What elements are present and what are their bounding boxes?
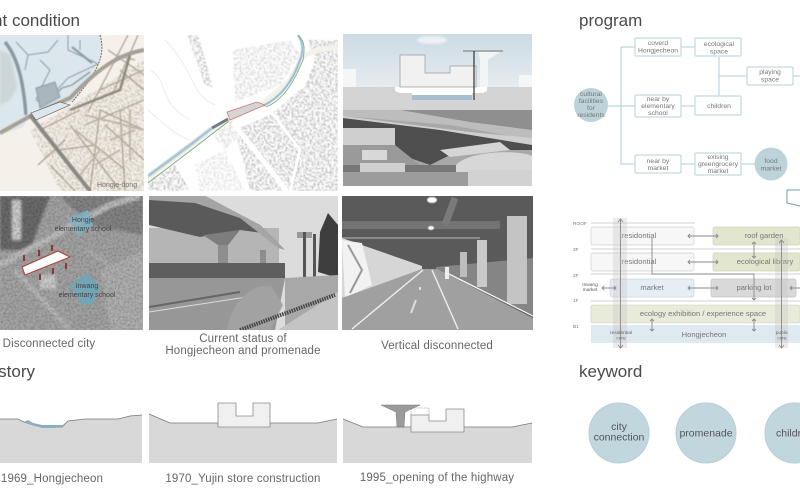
caption: Current status of Hongjecheon and promenade: Current status of <box>199 333 287 345</box>
node: food market <box>754 148 788 180</box>
panel: figure-ground map <box>148 35 338 191</box>
label: Inwang elementary school: Inwang <box>76 283 98 290</box>
core: residential <box>610 218 632 348</box>
node: exising greengrocery market: greengrocery <box>698 161 739 168</box>
core: residential: core <box>616 336 626 342</box>
keyword: city connection <box>589 403 649 463</box>
core: public: core <box>777 336 787 342</box>
node: near by elementary school: school <box>648 110 668 117</box>
caption: Disconnected city: Disconnected city <box>3 338 95 350</box>
node: exising greengrocery market: exising <box>707 154 729 161</box>
node: cultural facilities for residents: facilities <box>579 98 604 105</box>
node: playing space <box>747 67 793 85</box>
room: residential 3F: residontial <box>622 257 657 266</box>
core: residential: residential <box>610 330 632 336</box>
node: playing space: playing <box>759 69 781 76</box>
room: ecological library <box>713 253 800 271</box>
node: children <box>695 96 741 115</box>
keyword: city connection: city <box>611 421 628 433</box>
label: Inwang market: Inwang <box>582 282 598 288</box>
flow chart: program <box>574 38 800 180</box>
node: near by market <box>635 155 681 173</box>
label: Hongje elementary school: elementary school <box>55 226 112 233</box>
room: parking lot: parking lot <box>736 283 772 292</box>
panel: photo under highway <box>343 110 532 186</box>
panel: 1969 section <box>0 415 142 463</box>
panel: 1995 section <box>343 405 532 463</box>
room: parking lot <box>711 279 796 297</box>
node: near by market: market <box>648 165 668 172</box>
title: keyword: keyword <box>579 362 642 381</box>
arrows between rooms <box>602 234 800 331</box>
room: ecology exhibition / experience space: ecology exhibition / experience space <box>640 309 766 318</box>
floor labels: 2F <box>573 273 579 279</box>
panel: aerial photo <box>0 196 143 330</box>
label: Hongje elementary school: Hongje <box>72 217 94 224</box>
node: ecological space <box>695 38 741 56</box>
caption: 1995_opening of the highway: 1995_opening of the highway <box>360 472 514 484</box>
room: ecological library: ecological library <box>737 257 793 266</box>
node: cultural facilities for residents: for <box>587 105 596 112</box>
node: coverd Hongjecheon: Hongjecheon <box>638 48 678 54</box>
caption: Vertical disconnected: Vertical disconnected <box>381 340 493 352</box>
node: cultural facilities for residents: cultural <box>580 91 602 98</box>
icon: site outline <box>787 190 800 206</box>
panel: vertical section diagram <box>343 34 532 110</box>
panel: urban map <box>0 35 144 191</box>
floor labels: ROOF <box>573 221 587 227</box>
room: market: market <box>640 283 664 292</box>
room: market <box>610 279 694 297</box>
node: playing space: space <box>761 76 779 84</box>
panel: photo cycle path <box>342 196 533 330</box>
room: Hongjecheon: Hongjecheon <box>682 330 726 339</box>
node: near by elementary school <box>635 95 681 117</box>
caption: 1969_Hongjecheon: 1969_Hongjecheon <box>1 473 103 485</box>
section diagram: floor program <box>573 218 800 348</box>
label: Inwang market: market <box>583 287 598 293</box>
floor labels: 1F <box>573 298 579 304</box>
core: public <box>775 238 789 348</box>
keyword: children <box>765 403 800 463</box>
node: near by elementary school: near by <box>647 96 670 103</box>
node: food market: market <box>761 166 781 172</box>
floor labels: 3F <box>573 247 579 253</box>
room: ecology exhibition / experience space <box>591 305 800 323</box>
floor labels: B1 <box>573 324 579 330</box>
node: coverd Hongjecheon <box>635 38 681 56</box>
node: exising greengrocery market: market <box>708 168 728 175</box>
node: cultural facilities for residents <box>574 88 608 122</box>
keyword: promenade: promenade <box>679 428 733 440</box>
node: children: children <box>707 103 731 110</box>
core: public: public <box>776 330 789 336</box>
room: residential 3F <box>591 253 694 271</box>
caption: 1970_Yujin store construction: 1970_Yujin store construction <box>165 473 321 485</box>
room: Hongjecheon <box>591 325 800 343</box>
node: exising greengrocery market <box>695 153 741 175</box>
title: program: program <box>579 11 642 30</box>
caption: Current status of Hongjecheon and promenade: Hongjecheon and promenade <box>165 345 321 357</box>
label: Inwang elementary school: elementary school <box>59 292 116 299</box>
node: near by market: near by <box>647 158 670 165</box>
node: near by elementary school: elementary <box>641 103 675 110</box>
node: cultural facilities for residents: residents <box>577 112 605 119</box>
node: coverd Hongjecheon: coverd <box>648 40 668 47</box>
keyword: promenade <box>676 403 736 463</box>
room: residential roof: residontial <box>622 231 657 240</box>
panel: photo Hongjecheon and promenade <box>149 196 338 330</box>
keyword: city connection: connection <box>594 432 645 444</box>
node: food market: food <box>764 158 778 165</box>
room: roof garden <box>713 227 800 245</box>
room: residential roof <box>591 227 694 245</box>
panel: 1970 section <box>149 403 337 463</box>
node: ecological space: space <box>710 48 728 56</box>
label: Hongje-dong: Hongje-dong <box>97 182 137 189</box>
room: roof garden: roof garden <box>745 231 783 240</box>
floor labels <box>573 221 587 330</box>
node: ecological space: ecological <box>704 41 735 48</box>
